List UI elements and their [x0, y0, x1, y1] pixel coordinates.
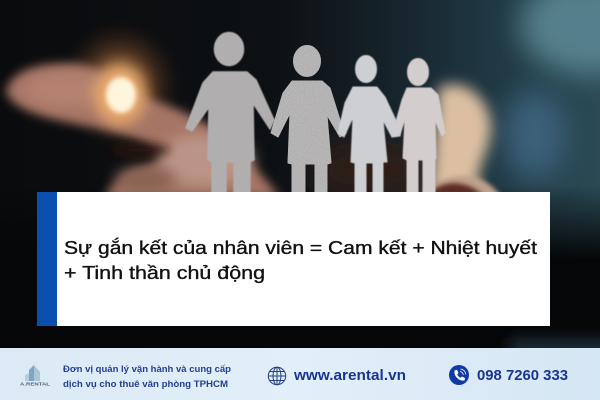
icon: globe: [268, 367, 286, 385]
panel blue accent bar: [37, 192, 57, 326]
phone number: 098 7260 333: [477, 368, 568, 384]
panel statement: [64, 237, 537, 283]
icon: A-Rental logo: [20, 365, 50, 386]
tagline: dịch vụ cho thuê văn phòng TPHCM: [63, 379, 228, 390]
panel statement: Sự gắn kết của nhân viên = Cam kết + Nhiệt huyết: [64, 237, 537, 258]
panel background: [37, 192, 550, 326]
text panel: [37, 192, 550, 326]
paper figures: [186, 32, 445, 193]
icon: phone: [449, 365, 469, 385]
panel statement: + Tinh thần chủ động: [64, 263, 265, 283]
figure 1: [186, 32, 274, 193]
website: www.arental.vn: [293, 368, 406, 384]
figure 4: [395, 58, 445, 193]
figure 3: [338, 56, 400, 193]
icon: A-Rental logo: A.RENTAL: [20, 382, 50, 386]
tagline: Đơn vị quản lý vận hành và cung cấp: [63, 364, 231, 375]
footer bar: [0, 348, 600, 400]
tagline: [63, 364, 231, 390]
figure 2: [271, 46, 346, 193]
